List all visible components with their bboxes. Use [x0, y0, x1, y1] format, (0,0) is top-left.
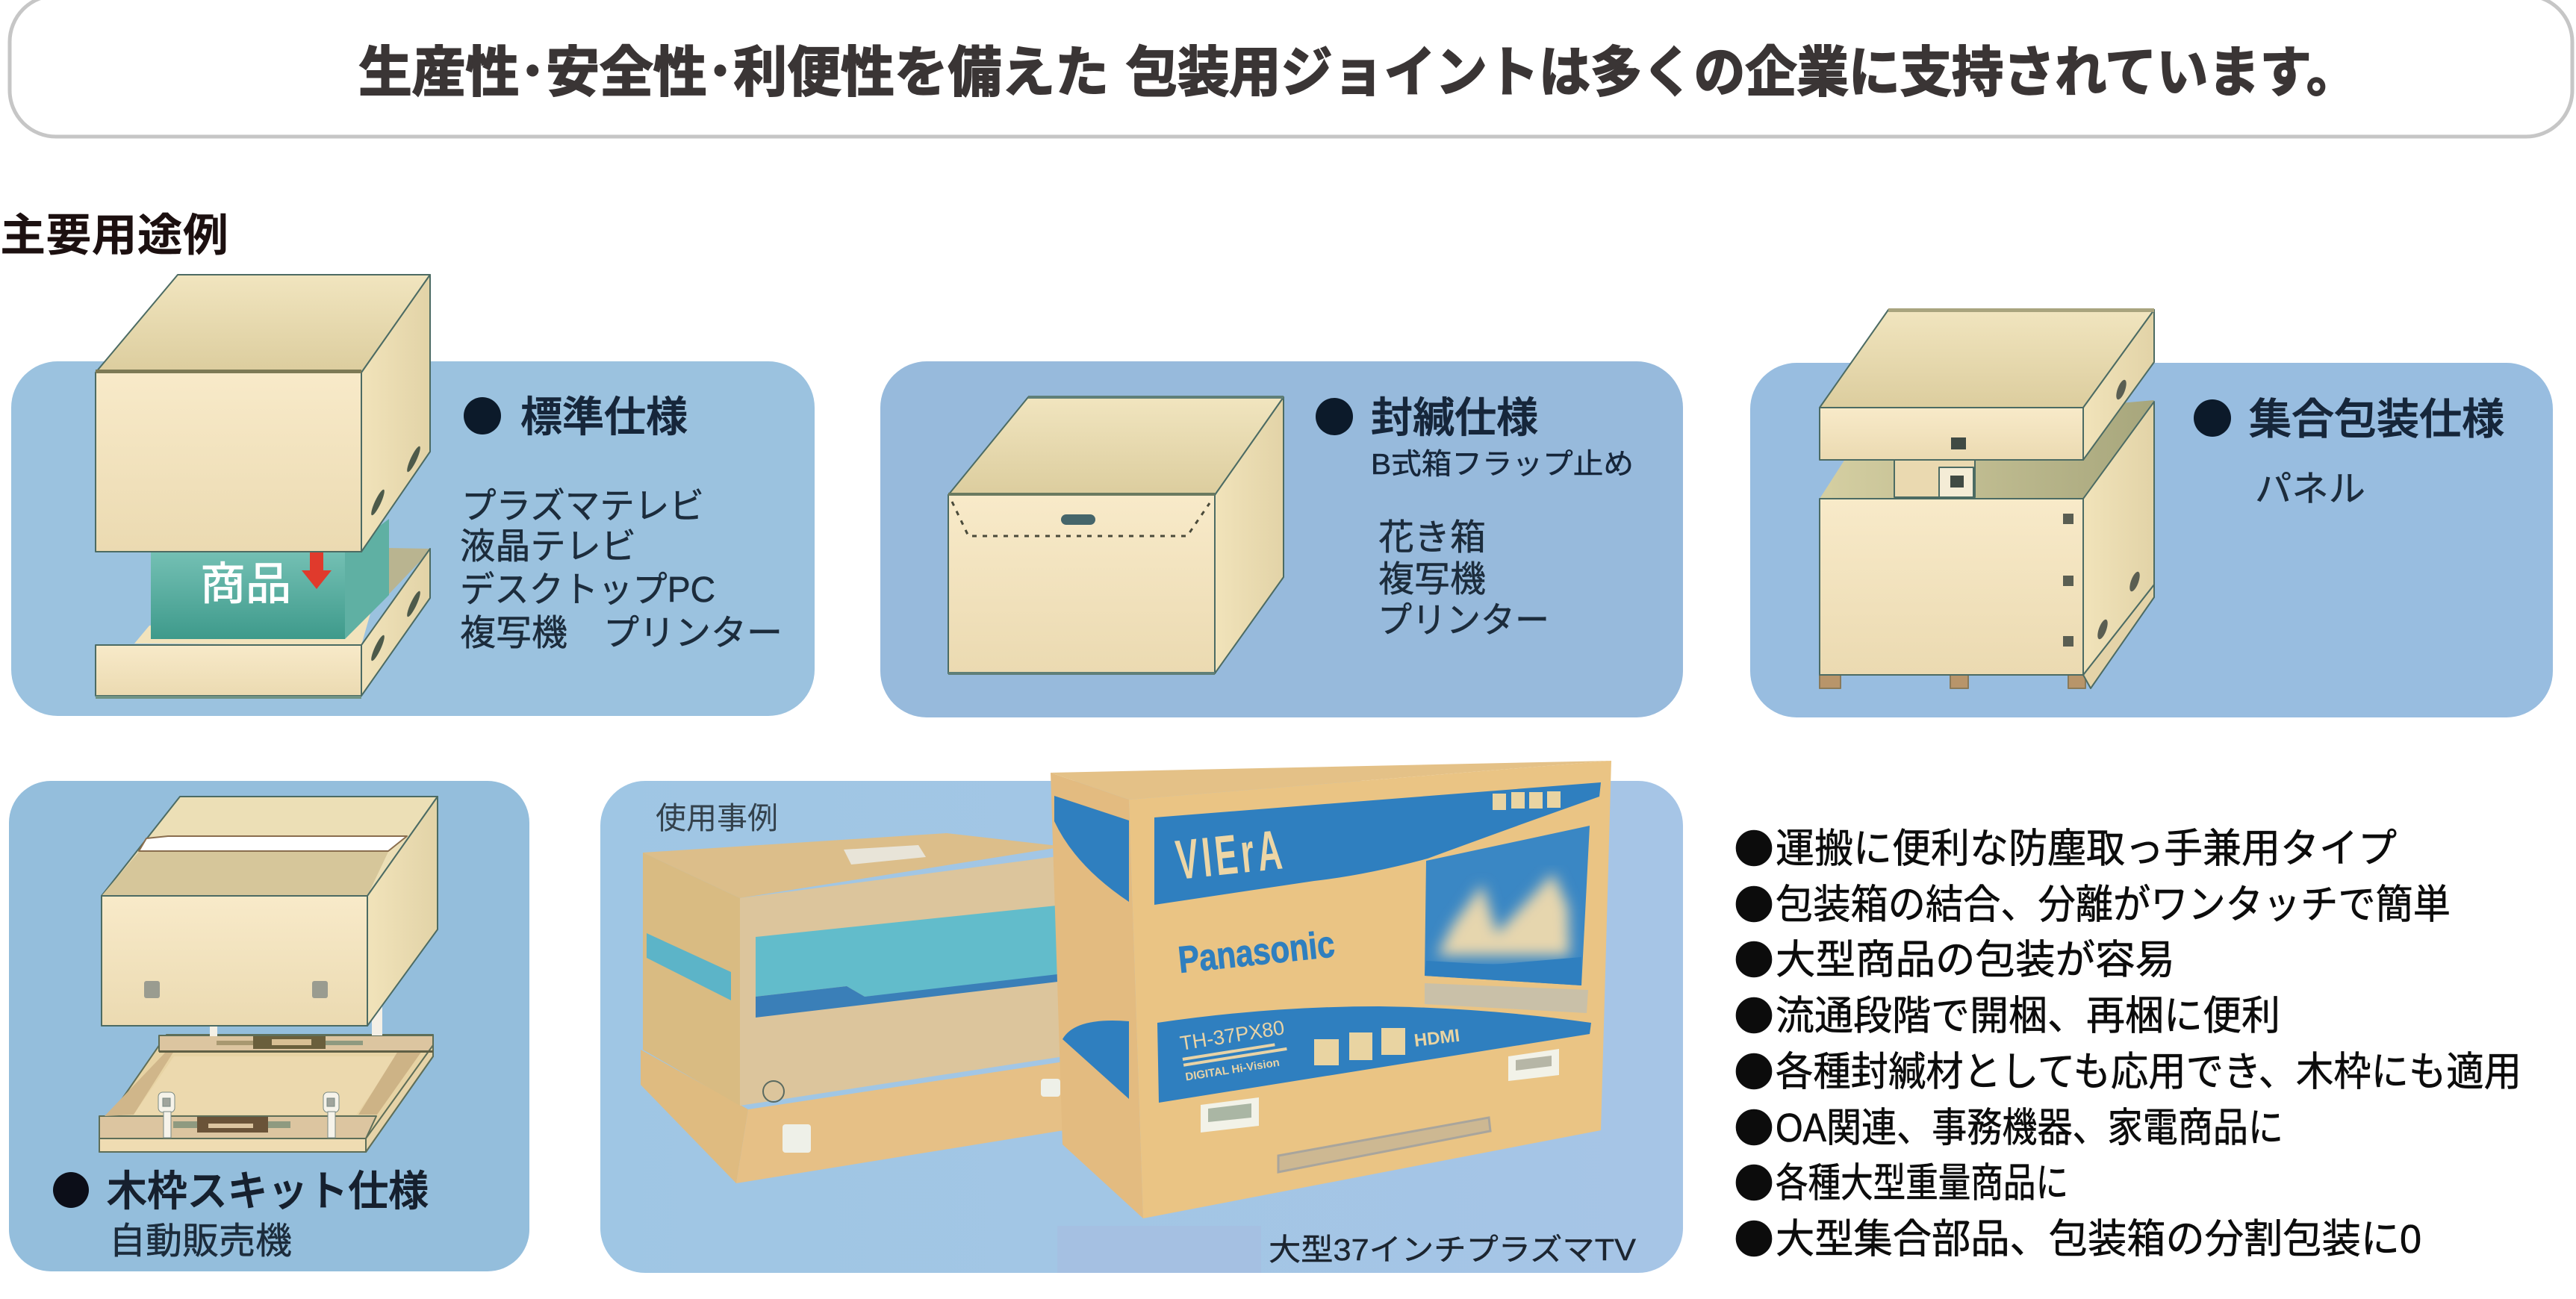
list: standard spec uses: 複写機 プリンター [460, 614, 783, 653]
illustration: lid box [102, 797, 438, 1036]
feature bullet list [1736, 826, 2521, 1262]
title banner [10, 0, 2572, 137]
illustration: standard box with product [96, 275, 430, 699]
list: sealed spec uses: 複写機 [1378, 560, 1486, 599]
arrow: red down [302, 552, 332, 589]
illustration: two part box on pallet [1820, 308, 2154, 688]
feature bullet list: OA関連、事務機器、家電商品に [1776, 1106, 2283, 1150]
blue band: viera [1154, 782, 1601, 905]
photo: left tv carton [641, 833, 1064, 1183]
list: standard spec uses [460, 487, 783, 653]
photo: right tv carton [1051, 761, 1611, 1218]
illustration: sealed box [948, 396, 1284, 675]
feature bullet list: 流通段階で開梱、再梱に便利 [1776, 994, 2280, 1038]
caption: photo subject [1057, 1226, 1637, 1273]
logo: panasonic: Panasonic [1176, 923, 1337, 981]
logo: viera: VIErA [1173, 818, 1288, 892]
section heading: 主要用途例 [0, 211, 228, 261]
icon: wood grain patches [159, 1036, 433, 1133]
heading: standard spec: 標準仕様 [520, 393, 688, 440]
model name [1178, 1016, 1290, 1083]
icon: feature marks: HDMI [1413, 1026, 1461, 1051]
feature bullet list: 包装箱の結合、分離がワンタッチで簡単 [1776, 882, 2451, 927]
panel: usage example photo [600, 761, 1683, 1273]
blue side swooshes [1054, 796, 1129, 1099]
title banner: 生産性･安全性･利便性を備えた [358, 43, 1109, 103]
list: standard spec uses: プラズマテレビ [461, 487, 704, 526]
model name: TH-37PX80 [1178, 1016, 1286, 1055]
caption: usage example: 使用事例 [656, 801, 778, 835]
heading: sealed spec: 封緘仕様 [1371, 394, 1538, 441]
icon: handle cutouts [1951, 379, 2141, 647]
list: wood frame kit uses: 自動販売機 [109, 1221, 292, 1262]
product label: 商品 [200, 559, 291, 609]
heading: assembled packaging spec: 集合包装仕様 [2249, 396, 2504, 443]
feature bullet list: 大型商品の包装が容易 [1776, 938, 2175, 982]
title banner: 包装用ジョイントは多くの企業に支持されています。 [1126, 43, 2358, 103]
icon: fastening clips [158, 1092, 339, 1138]
panel: standard spec [11, 275, 815, 716]
list: sealed spec uses: 花き箱 [1378, 518, 1486, 558]
icon: side hand holes [369, 445, 423, 662]
feature bullet list: 大型集合部品、包装箱の分割包装に0 [1776, 1217, 2421, 1262]
panel: wood frame kit spec [9, 781, 529, 1271]
printed strip [1278, 1118, 1490, 1172]
feature bullet list: 各種封緘材としても応用でき、木枠にも適用 [1776, 1050, 2521, 1094]
feature bullet list: 運搬に便利な防塵取っ手兼用タイプ [1776, 826, 2397, 871]
list: standard spec uses: 液晶テレビ [460, 527, 636, 567]
model name: DIGITAL Hi-Vision [1184, 1056, 1281, 1083]
panel: sealed spec [880, 361, 1683, 717]
heading: sealed spec [1316, 394, 1634, 481]
white carton labels [1201, 1049, 1559, 1133]
caption: photo subject: 大型37インチプラズマTV [1269, 1233, 1637, 1267]
list: sealed spec uses [1378, 518, 1549, 641]
list: standard spec uses: デスクトップPC [460, 570, 715, 610]
panel: assembled packaging spec [1750, 308, 2553, 717]
feature bullet list: 各種大型重量商品に [1776, 1161, 2068, 1206]
icon: feature marks [1314, 791, 1561, 1065]
heading: wood frame kit spec: 木枠スキット仕様 [107, 1168, 429, 1215]
illustration: wood frame [99, 1035, 433, 1152]
list: assembled packaging uses: パネル [2255, 470, 2365, 509]
tv screen picture [1425, 826, 1590, 1013]
list: sealed spec uses: プリンター [1378, 601, 1549, 641]
blue band: model [1157, 1006, 1591, 1103]
heading: sealed spec: B式箱フラップ止め [1371, 449, 1634, 481]
